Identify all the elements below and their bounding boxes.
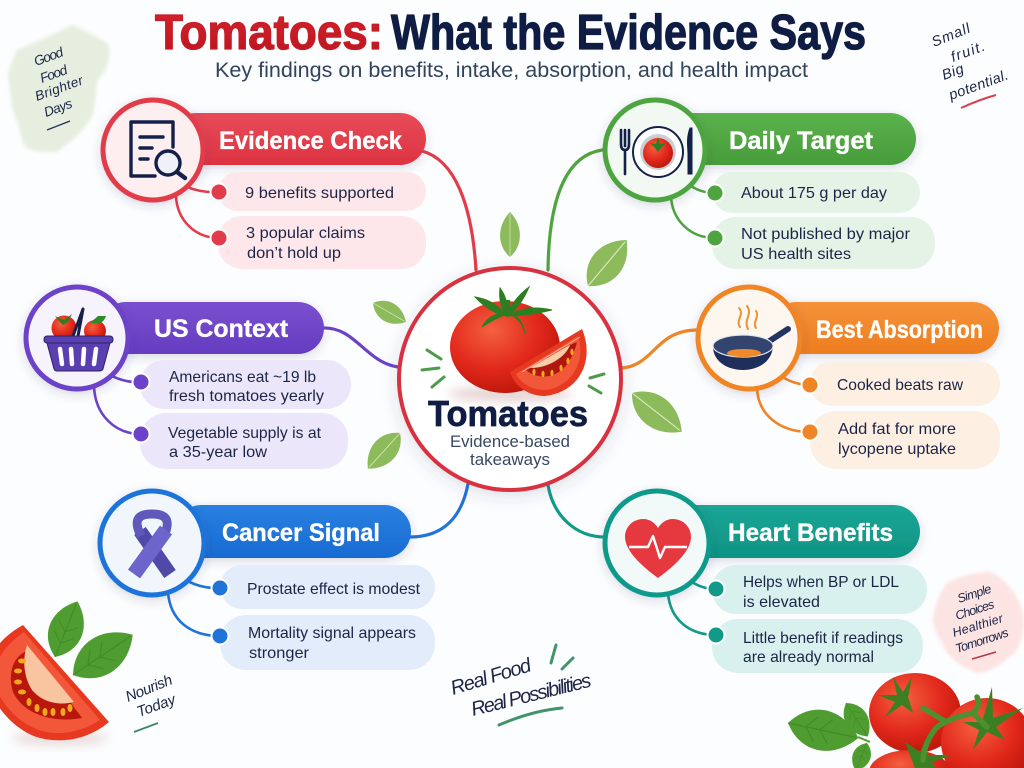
note: nourish today: Nourish [123,672,175,706]
note: small fruit big potential: Small [930,21,973,51]
sparkle ticks [422,350,604,393]
note: simple choices healthier tomorrows: Tomorrows [954,626,1010,656]
heading pill [640,113,916,165]
panel: US Context [26,287,351,469]
item: cooked: Cooked beats raw [837,377,963,394]
heading pill [100,302,324,354]
item: not published: US health sites [741,246,851,263]
title: What the Evidence Says [391,6,866,60]
note: good food brighter days: Brighter [33,72,85,104]
item: not published [706,217,935,269]
heading pill: Heart Benefits [728,519,893,547]
note: nourish today: Today [135,691,179,721]
note: good food brighter days: Days [42,96,75,120]
item: benefits: 9 benefits supported [245,185,394,202]
note: good food brighter days: Good [32,44,66,69]
item: claims: don’t hold up [247,245,341,262]
note: simple choices healthier tomorrows [933,572,1024,673]
note: real food real possibilities [448,645,594,725]
connector lines to hub [322,150,698,537]
item: mortality: Mortality signal appears [248,625,416,642]
item: supply: Vegetable supply is at [168,425,322,442]
item: helps [706,565,927,614]
subtitle: Key findings on benefits, intake, absorption, and health impact [215,59,808,82]
panel: Evidence Check [103,100,426,269]
item: little benefit [706,619,923,673]
icon: plate with tomato [605,100,705,200]
panel: Daily Target [605,100,935,269]
note: simple choices healthier tomorrows: Simple [956,582,993,606]
heading pill: Cancer Signal [222,519,380,547]
heading pill [170,113,426,165]
item: consumption: fresh tomatoes yearly [169,388,324,405]
note: simple choices healthier tomorrows: Choices [954,597,996,623]
item: mortality: stronger [249,645,310,662]
icon: frying pan [698,287,800,389]
central hub [399,268,621,490]
item: cooked [800,361,1000,406]
item: fat [800,411,1000,469]
item: prostate [210,565,435,609]
heading pill [640,505,920,558]
heading pill: Evidence Check [219,127,402,155]
icon: document and magnifier [103,100,203,200]
note: small fruit big potential: Big [940,61,966,84]
hub subtitle: Evidence-based [450,432,570,451]
illustration: vine tomatoes, bottom right [784,673,1024,768]
hub subtitle: takeaways [470,450,550,469]
item: supply [132,413,348,469]
item: claims: 3 popular claims [246,225,365,242]
item: amount: About 175 g per day [741,185,887,202]
panel: Best Absorption [698,287,1000,469]
item: consumption [132,360,351,409]
item: mortality [210,615,435,670]
heading pill [175,505,411,558]
item: little benefit: Little benefit if readings [743,630,903,647]
decorative leaves around hub [359,212,691,477]
item: consumption: Americans eat ~19 lb [169,369,316,386]
item: little benefit: are already normal [743,649,874,666]
heading pill: Best Absorption [816,316,983,344]
item: helps: Helps when BP or LDL [743,574,899,591]
item: supply: a 35-year low [169,444,267,461]
icon: awareness ribbon [100,491,204,595]
hub title: Tomatoes [428,393,588,434]
note: real food real possibilities: Real Possibilities [469,670,594,721]
item: helps: is elevated [743,594,820,611]
note: good food brighter days [8,25,110,152]
panel: Cancer Signal [100,491,435,670]
title: Tomatoes: [155,6,383,60]
item: amount [706,172,920,213]
icon: heart with pulse [605,491,709,595]
note: nourish today [123,672,179,732]
panel: Heart Benefits [605,491,927,673]
heading pill [770,302,999,354]
item: fat: Add fat for more [838,421,956,438]
item: claims [210,216,426,269]
title [155,6,866,60]
note: small fruit big potential [930,21,1011,108]
item: not published: Not published by major [741,226,911,243]
note: real food real possibilities: Real Food [448,654,535,700]
icon: basket of tomatoes [26,287,128,389]
heading pill: Daily Target [729,127,874,155]
note: simple choices healthier tomorrows: Healthier [951,611,1005,640]
item: fat: lycopene uptake [838,441,956,458]
illustration: tomato wedge and leaves, bottom left [0,595,143,746]
item: benefits [210,172,426,211]
icon: whole tomato and slice [448,287,587,402]
heading pill: US Context [154,315,289,343]
item: prostate: Prostate effect is modest [247,581,421,598]
note: small fruit big potential: fruit. [949,39,987,66]
hub subtitle [450,432,570,469]
note: small fruit big potential: potential. [946,68,1011,104]
note: good food brighter days: Food [38,62,70,86]
